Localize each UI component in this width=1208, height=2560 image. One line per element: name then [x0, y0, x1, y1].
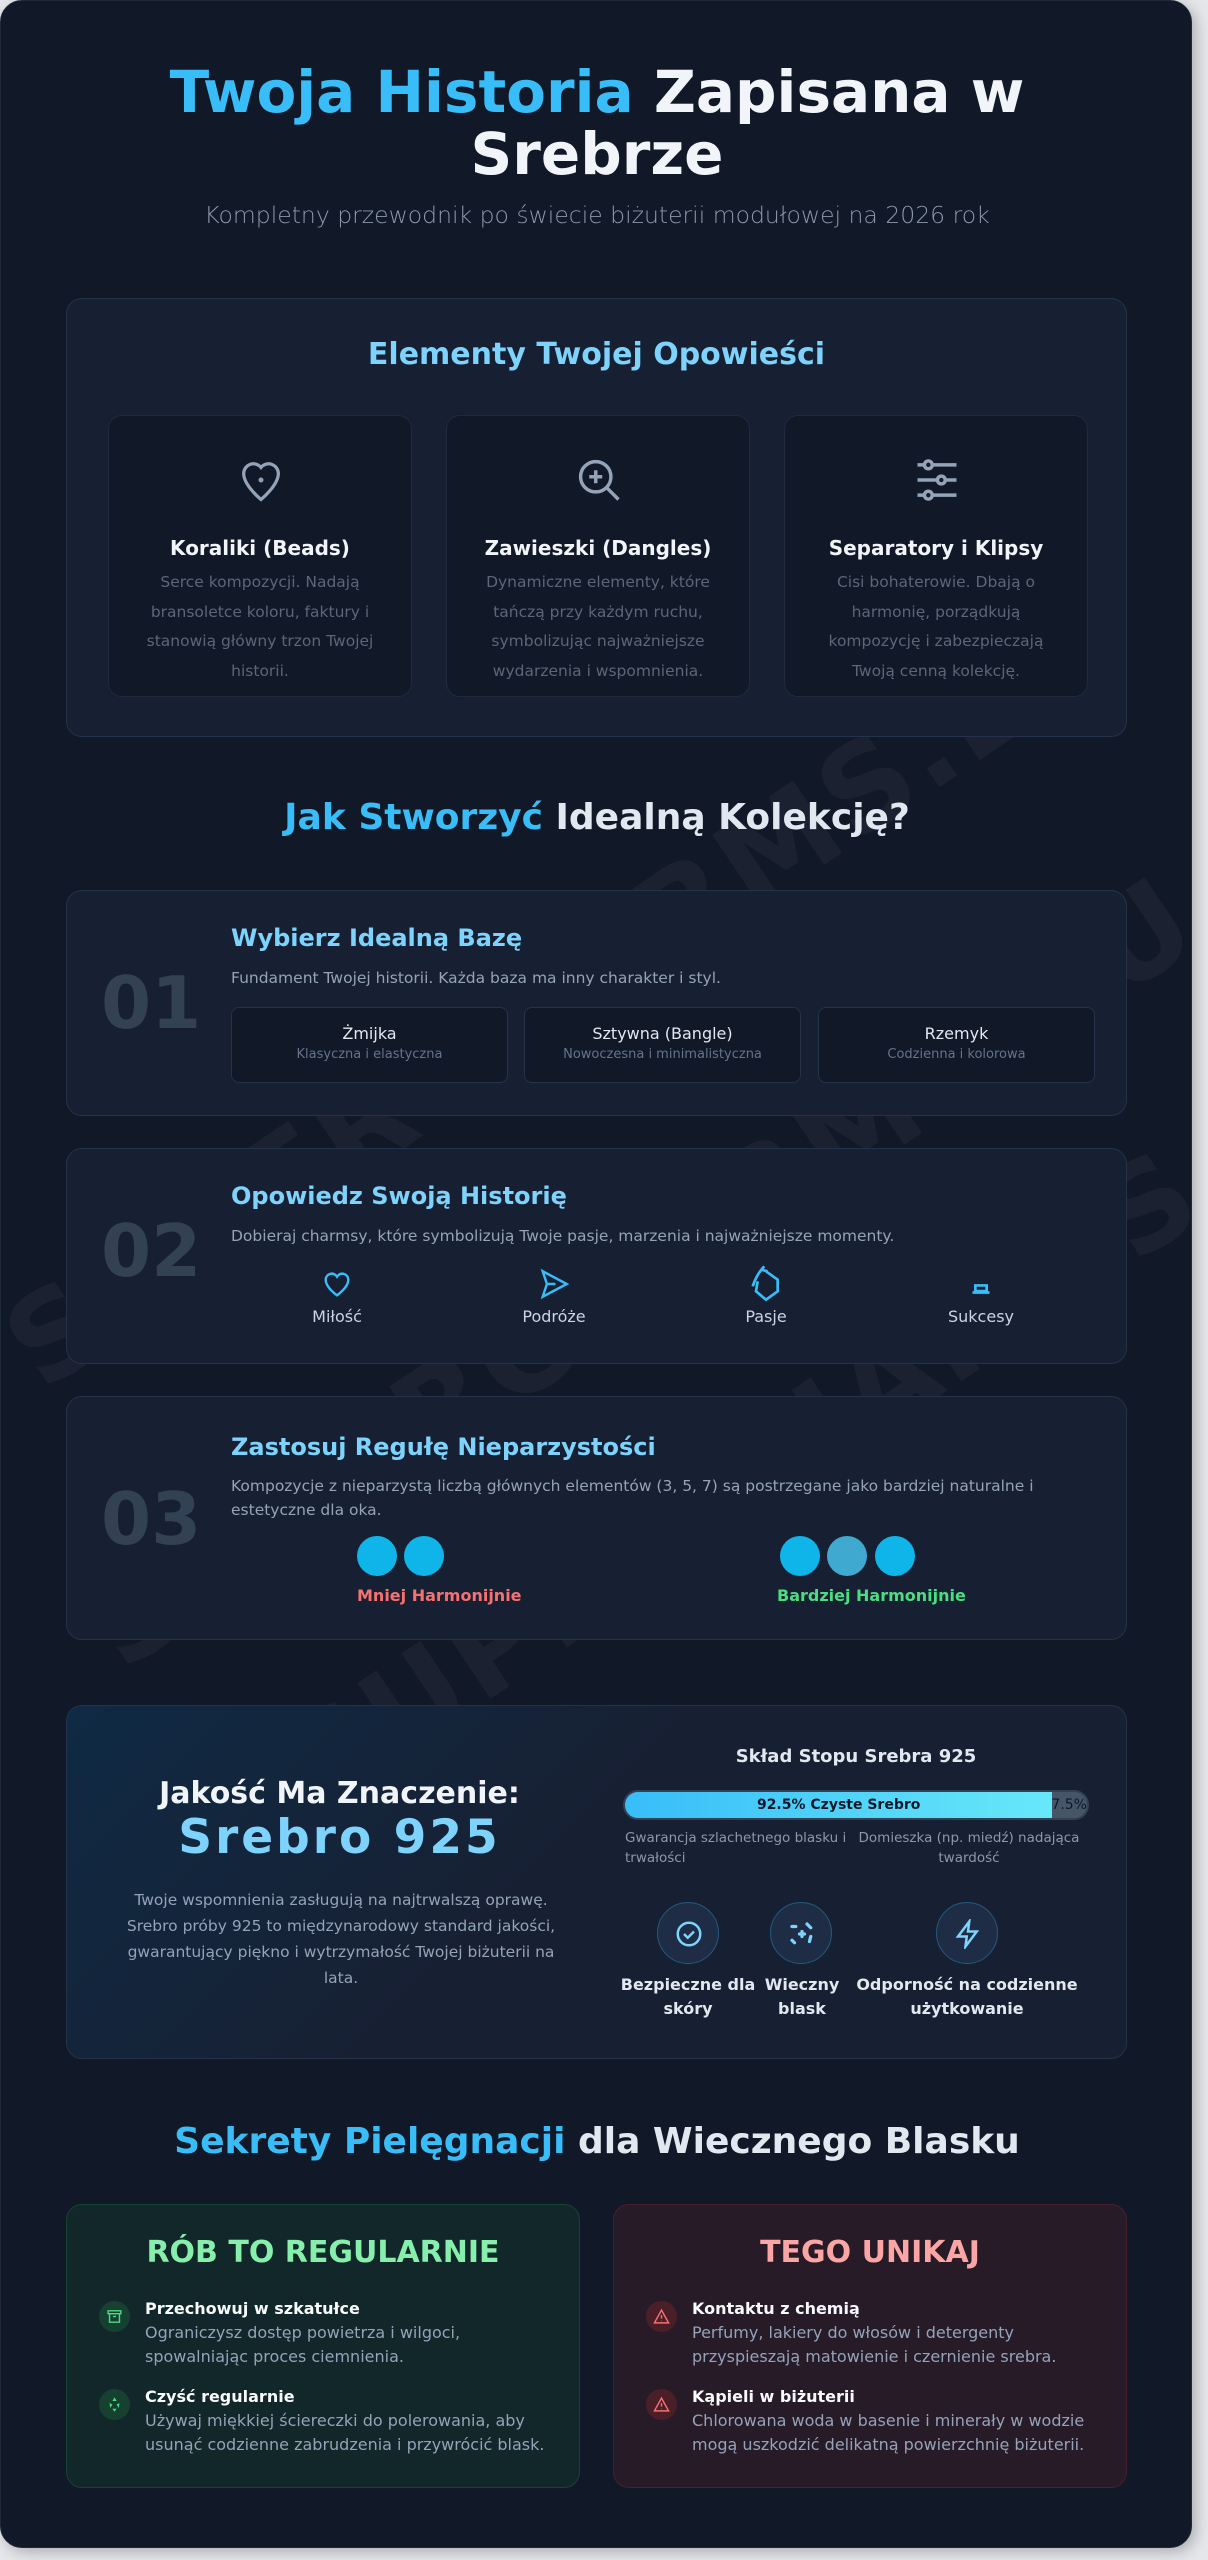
alloy chart: Skład Stopu Srebra 925	[736, 1746, 976, 1767]
alloy chart: Domieszka (np. miedź) nadająca twardość	[859, 1830, 1079, 1866]
icon: love	[312, 1272, 362, 1326]
step 03: 03	[101, 1477, 201, 1561]
panel: do regularly: Ograniczysz dostęp powietrza i wilgoci, spowalniając proces ciemnienia.	[145, 2323, 460, 2366]
step 01: 01	[101, 961, 201, 1045]
feature: shine	[770, 1902, 832, 1964]
item: chemicals	[646, 2301, 677, 2332]
step 01: Wybierz Idealną Bazę	[231, 924, 522, 952]
main card: SUPERCHARMS.EU	[0, 570, 1142, 1416]
quality text: Twoje wspomnienia zasługują na najtrwalszą oprawę. Srebro próby 925 to międzynarodowy standard jakości, gwarantujący piękno i wytrzymałość Twojej biżuterii na lata.	[127, 1891, 555, 1987]
step 01: Nowoczesna i minimalistyczna	[563, 1047, 762, 1062]
card: dangles: Dynamiczne elementy, które tańczą przy każdym ruchu, symbolizując najważniejsze wydarzenia i wspomnienia.	[486, 573, 710, 680]
icon: travel: Podróże	[522, 1307, 586, 1326]
icon: heart	[242, 462, 280, 502]
step 03: Kompozycje z nieparzystą liczbą głównych elementów (3, 5, 7) są postrzegane jako bardziej naturalne i estetyczne dla oka.	[231, 1477, 1034, 1519]
heading: elements: Elementy Twojej Opowieści	[368, 337, 825, 372]
panel: avoid: Chlorowana woda w basenie i minerały w wodzie mogą uszkodzić delikatną powierzchnię biżuterii.	[692, 2411, 1084, 2454]
base options	[231, 1007, 508, 1083]
alloy chart: 7.5%	[1051, 1797, 1087, 1813]
panel: do regularly	[66, 2204, 580, 2488]
panel: elements	[66, 298, 1127, 737]
panel: avoid: Perfumy, lakiery do włosów i detergenty przyspieszają matowienie i czernienie srebra.	[692, 2323, 1056, 2366]
card: separators	[784, 415, 1088, 697]
subtitle: Kompletny przewodnik po świecie biżuterii modułowej na 2026 rok	[204, 201, 990, 229]
step 03: Zastosuj Regułę Nieparzystości	[231, 1433, 656, 1461]
icon: success: Sukcesy	[948, 1307, 1014, 1326]
panel: avoid: Kąpieli w biżuterii	[692, 2387, 855, 2406]
step 03	[66, 1396, 1127, 1640]
icon: love: Miłość	[312, 1307, 362, 1326]
card: dangles: Zawieszki (Dangles)	[485, 536, 711, 560]
panel: avoid	[613, 2204, 1127, 2488]
alloy chart	[623, 1746, 1089, 1866]
quality heading: Jakość Ma Znaczenie:	[159, 1776, 520, 1811]
step 01: Codzienna i kolorowa	[887, 1047, 1026, 1062]
card: dangles	[446, 415, 750, 697]
title: Srebrze	[471, 120, 723, 188]
item: bathing	[646, 2389, 677, 2420]
panel: silver 925: Bezpieczne dla skóry	[621, 1975, 755, 2018]
diagram: less harmonious: Mniej Harmonijnie	[357, 1586, 522, 1605]
panel: do regularly: Przechowuj w szkatułce	[145, 2299, 360, 2318]
feature: durability	[936, 1902, 998, 1964]
item: storage	[99, 2301, 130, 2332]
item: cleaning	[99, 2389, 130, 2420]
card: beads	[108, 415, 412, 697]
icon: passions	[745, 1265, 787, 1326]
panel: avoid: TEGO UNIKAJ	[760, 2235, 980, 2270]
step 01: Sztywna (Bangle)	[592, 1024, 733, 1043]
alloy chart: 92.5% Czyste Srebro	[757, 1797, 920, 1813]
panel: do regularly: Używaj miękkiej ściereczki do polerowania, aby usunąć codzienne zabrudzenia i przywrócić blask.	[145, 2411, 544, 2454]
title	[170, 58, 1024, 188]
card: separators: Cisi bohaterowie. Dbają o harmonię, porządkują kompozycję i zabezpieczają Twoją cenną kolekcję.	[829, 573, 1043, 680]
feature: skin safe	[657, 1902, 719, 1964]
diagram: more harmonious: Bardziej Harmonijnie	[777, 1586, 966, 1605]
panel: silver 925: Srebro 925	[178, 1810, 501, 1865]
step 02: 02	[101, 1209, 201, 1293]
step 01: Rzemyk	[925, 1024, 988, 1043]
panel: silver 925: Odporność na codzienne użytkowanie	[856, 1975, 1078, 2018]
step 01: Fundament Twojej historii. Każda baza ma inny charakter i styl.	[231, 969, 721, 987]
card: beads: Serce kompozycji. Nadają bransoletce koloru, faktury i stanowią główny trzon Twojej historii.	[147, 573, 373, 680]
icon: passions: Pasje	[745, 1307, 787, 1326]
panel: silver 925: Wieczny blask	[765, 1975, 839, 2018]
base options: Klasyczna i elastyczna	[297, 1047, 442, 1062]
title: Twoja Historia Zapisana w	[170, 58, 1024, 126]
icon: zoom	[578, 460, 620, 501]
diagram: less harmonious	[357, 1536, 522, 1605]
base options: Żmijka	[342, 1024, 397, 1043]
panel: do regularly: Czyść regularnie	[145, 2387, 295, 2406]
panel: silver 925	[66, 1705, 1127, 2059]
step 01	[66, 890, 1127, 1116]
step 02	[66, 1148, 1127, 1364]
main card: SUPERCHARMS.EU	[61, 850, 1192, 1696]
card: separators: Separatory i Klipsy	[829, 536, 1043, 560]
heading: care: Sekrety Pielęgnacji dla Wiecznego Blasku	[174, 2121, 1020, 2162]
icon: sliders	[918, 459, 956, 501]
icon: travel	[522, 1268, 586, 1326]
step 02: Dobieraj charmsy, które symbolizują Twoje pasje, marzenia i najważniejsze momenty.	[231, 1227, 894, 1245]
panel: avoid: Kontaktu z chemią	[692, 2299, 860, 2318]
alloy chart: Gwarancja szlachetnego blasku i trwałości	[625, 1830, 846, 1866]
icon: success	[948, 1284, 1014, 1326]
card: beads: Koraliki (Beads)	[170, 536, 350, 560]
diagram: more harmonious	[777, 1536, 966, 1605]
panel: do regularly: RÓB TO REGULARNIE	[146, 2235, 500, 2270]
heading: how to: Jak Stworzyć Idealną Kolekcję?	[284, 797, 910, 838]
step 02: Opowiedz Swoją Historię	[231, 1182, 567, 1210]
